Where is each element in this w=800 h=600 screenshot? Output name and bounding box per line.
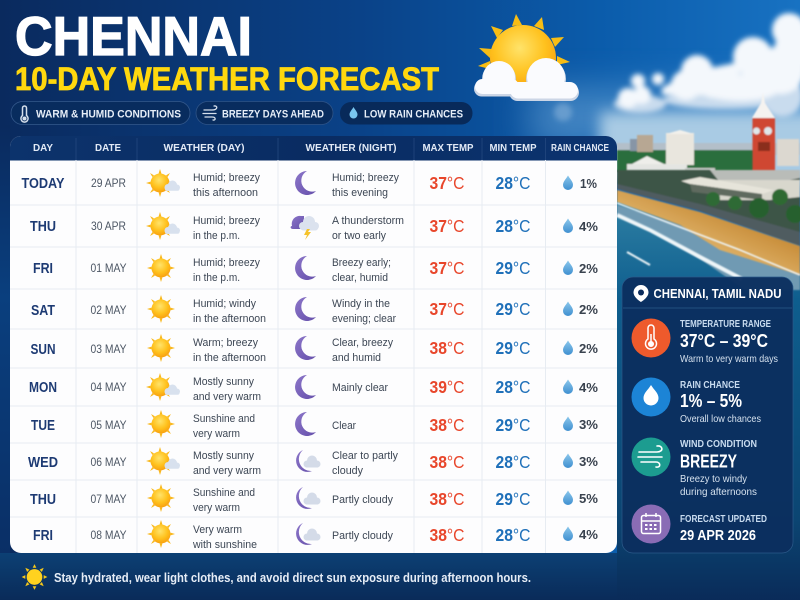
icon: thermometer xyxy=(21,106,28,122)
temperature range: Warm to very warm days xyxy=(680,353,778,365)
row: today: this evening xyxy=(332,187,388,199)
rain chance: RAIN CHANCE xyxy=(680,379,740,391)
row: fri 01 may: 29°C xyxy=(496,258,530,278)
row: thu 07 may: 07 MAY xyxy=(90,494,127,506)
row: fri 01 may: FRI xyxy=(33,261,53,277)
icon: calendar xyxy=(642,513,660,534)
sky clouds xyxy=(554,13,800,121)
footer tip: Stay hydrated, wear light clothes, and avoid direct sun exposure during afternoon hours. xyxy=(54,571,531,585)
row: wed 06 may: cloudy xyxy=(332,465,363,477)
row: thu 30 apr: 4% xyxy=(579,219,598,234)
row: fri 01 may xyxy=(33,254,598,284)
row: mon 04 may: 28°C xyxy=(496,377,530,397)
row: thu 07 may: 5% xyxy=(579,491,598,506)
row: mon 04 may xyxy=(29,373,598,403)
skyline xyxy=(617,130,800,172)
icon: sun xyxy=(22,564,47,590)
temperature range xyxy=(632,318,778,365)
icon: water drop xyxy=(644,385,658,406)
row: fri 08 may: 28°C xyxy=(496,525,530,545)
row: tue 05 may: 05 MAY xyxy=(90,420,127,432)
row: sun 03 may: 29°C xyxy=(496,338,530,358)
road, buildings and trees xyxy=(617,170,800,246)
row: tue 05 may: 29°C xyxy=(496,415,530,435)
row: today: 28°C xyxy=(496,173,530,193)
clock tower xyxy=(752,92,775,173)
row: thu 30 apr: 37°C xyxy=(430,216,464,236)
row: wed 06 may: 3% xyxy=(579,454,598,469)
row: wed 06 may: Mostly sunny xyxy=(193,450,254,462)
row: sat 02 may xyxy=(31,295,598,325)
row: thu 30 apr: A thunderstorm xyxy=(332,215,404,227)
row: today xyxy=(22,169,597,199)
row: sun 03 may: 2% xyxy=(579,341,598,356)
row: sat 02 may: SAT xyxy=(31,303,55,319)
row: sat 02 may: Humid; windy xyxy=(193,298,256,310)
table header bar: MAX TEMP xyxy=(422,142,474,154)
row: thu 07 may: very warm xyxy=(193,502,240,514)
row: thu 30 apr: Humid; breezy xyxy=(193,215,260,227)
surf xyxy=(617,203,800,279)
table header bar xyxy=(10,136,617,160)
row: mon 04 may: and very warm xyxy=(193,391,261,403)
row: fri 08 may: with sunshine xyxy=(192,539,257,551)
row: sun 03 may: in the afternoon xyxy=(193,352,266,364)
row: tue 05 may xyxy=(31,410,598,440)
wind condition: during afternoons xyxy=(680,486,757,498)
row: tue 05 may: Sunshine and xyxy=(193,413,255,425)
row: sun 03 may: Clear, breezy xyxy=(332,337,393,349)
table header bar: DATE xyxy=(95,142,121,154)
wind condition xyxy=(632,438,757,498)
row: sat 02 may: 02 MAY xyxy=(90,305,127,317)
temperature range: 37°C – 39°C xyxy=(680,331,768,351)
beach xyxy=(617,190,800,275)
row: mon 04 may: Mostly sunny xyxy=(193,376,254,388)
subtitle: 10-DAY WEATHER FORECAST xyxy=(15,61,439,97)
row: fri 08 may: FRI xyxy=(33,528,53,544)
row: thu 30 apr: THU xyxy=(30,219,56,235)
row: thu 07 may xyxy=(30,484,598,514)
row: sun 03 may xyxy=(30,334,598,364)
row: thu 30 apr: 28°C xyxy=(496,216,530,236)
sea xyxy=(617,200,800,600)
row: wed 06 may: and very warm xyxy=(193,465,261,477)
location name: CHENNAI, TAMIL NADU xyxy=(654,287,782,301)
row: thu 30 apr: or two early xyxy=(332,230,386,242)
row: sun 03 may: SUN xyxy=(30,342,56,358)
wind condition: BREEZY xyxy=(680,452,737,472)
table header bar: DAY xyxy=(33,142,53,154)
row: mon 04 may: 39°C xyxy=(430,377,464,397)
icon: wind xyxy=(638,446,662,467)
row: sun 03 may: 38°C xyxy=(430,338,464,358)
row: wed 06 may: 28°C xyxy=(496,452,530,472)
row: wed 06 may xyxy=(28,447,598,477)
row: sat 02 may: evening; clear xyxy=(332,313,396,325)
row: tue 05 may: Clear xyxy=(332,420,356,432)
row: fri 01 may: Breezy early; xyxy=(332,257,391,269)
row: mon 04 may: 4% xyxy=(579,380,598,395)
row: thu 07 may: 29°C xyxy=(496,489,530,509)
row: fri 08 may: 4% xyxy=(579,527,598,542)
row: sat 02 may: 29°C xyxy=(496,299,530,319)
row: fri 01 may: 37°C xyxy=(430,258,464,278)
row: sat 02 may: 37°C xyxy=(430,299,464,319)
row: sun 03 may: 03 MAY xyxy=(90,344,127,356)
row: thu 07 may: Partly cloudy xyxy=(332,494,393,506)
row: wed 06 may: 06 MAY xyxy=(90,457,127,469)
pill: low rain: LOW RAIN CHANCES xyxy=(364,108,463,120)
row: mon 04 may: MON xyxy=(29,380,57,396)
row: today: Humid; breezy xyxy=(193,172,260,184)
pill: low rain xyxy=(340,102,472,124)
icon: map pin xyxy=(634,285,648,302)
row: mon 04 may: Mainly clear xyxy=(332,382,388,394)
row: thu 30 apr: 30 APR xyxy=(91,221,126,233)
pill: warm and humid xyxy=(11,102,190,124)
title: Chennai: CHENNAI xyxy=(15,5,252,67)
forecast updated xyxy=(632,504,767,544)
forecast updated: 29 APR 2026 xyxy=(680,528,756,544)
row: wed 06 may: 38°C xyxy=(430,452,464,472)
table header bar: WEATHER (NIGHT) xyxy=(306,142,396,154)
row: sat 02 may: 2% xyxy=(579,302,598,317)
footer tip xyxy=(22,564,531,590)
row: fri 08 may: 38°C xyxy=(430,525,464,545)
row: today: 1% xyxy=(580,176,597,191)
wind condition: WIND CONDITION xyxy=(680,438,757,450)
pill: breezy days xyxy=(196,102,333,124)
row: sun 03 may: Warm; breezy xyxy=(193,337,258,349)
footer background xyxy=(0,553,617,600)
panel: location summary xyxy=(622,277,793,553)
row: today: 37°C xyxy=(430,173,464,193)
row: fri 08 may: Partly cloudy xyxy=(332,530,393,542)
shallow water xyxy=(617,205,800,290)
row: fri 01 may: clear, humid xyxy=(332,272,388,284)
row: tue 05 may: 3% xyxy=(579,417,598,432)
icon: wind xyxy=(203,106,217,120)
row: tue 05 may: very warm xyxy=(193,428,240,440)
forecast updated: FORECAST UPDATED xyxy=(680,513,767,525)
row: fri 01 may: 2% xyxy=(579,261,598,276)
row: sat 02 may: in the afternoon xyxy=(193,313,266,325)
row: fri 08 may xyxy=(33,520,598,551)
row: fri 01 may: 01 MAY xyxy=(90,263,127,275)
rain chance xyxy=(632,378,761,425)
row: thu 30 apr xyxy=(30,212,598,242)
row: fri 01 may: in the p.m. xyxy=(193,272,240,284)
row: today: TODAY xyxy=(22,176,65,192)
table header bar: RAIN CHANCE xyxy=(551,142,609,154)
temperature range: TEMPERATURE RANGE xyxy=(680,318,771,330)
row: today: this afternoon xyxy=(193,187,258,199)
pill: warm and humid: WARM & HUMID CONDITIONS xyxy=(36,108,181,120)
row: today: Humid; breezy xyxy=(332,172,399,184)
left background strip xyxy=(0,125,10,555)
rain chance: 1% – 5% xyxy=(680,391,742,411)
row: sat 02 may: Windy in the xyxy=(332,298,390,310)
row: fri 08 may: Very warm xyxy=(193,524,242,536)
pill: breezy days: BREEZY DAYS AHEAD xyxy=(222,108,324,120)
row: wed 06 may: Clear to partly xyxy=(332,450,398,462)
row: sun 03 may: and humid xyxy=(332,352,381,364)
icon: large sun behind clouds xyxy=(474,14,579,101)
rain chance: Overall low chances xyxy=(680,413,761,425)
row: thu 07 may: 38°C xyxy=(430,489,464,509)
row: tue 05 may: 38°C xyxy=(430,415,464,435)
row: thu 07 may: Sunshine and xyxy=(193,487,255,499)
row: today: 29 APR xyxy=(91,178,126,190)
table header bar: WEATHER (DAY) xyxy=(164,142,244,154)
coastal city photo scene xyxy=(530,13,800,600)
forecast table xyxy=(10,136,617,553)
row: tue 05 may: TUE xyxy=(31,418,55,434)
row: mon 04 may: 04 MAY xyxy=(90,382,127,394)
wind condition: Breezy to windy xyxy=(680,473,748,485)
row: thu 07 may: THU xyxy=(30,492,56,508)
row: fri 01 may: Humid; breezy xyxy=(193,257,260,269)
table header bar: MIN TEMP xyxy=(490,142,536,154)
icon: drop xyxy=(350,107,358,118)
row: thu 30 apr: in the p.m. xyxy=(193,230,240,242)
row: fri 08 may: 08 MAY xyxy=(90,530,127,542)
row: wed 06 may: WED xyxy=(28,455,58,471)
icon: thermometer xyxy=(646,325,656,349)
